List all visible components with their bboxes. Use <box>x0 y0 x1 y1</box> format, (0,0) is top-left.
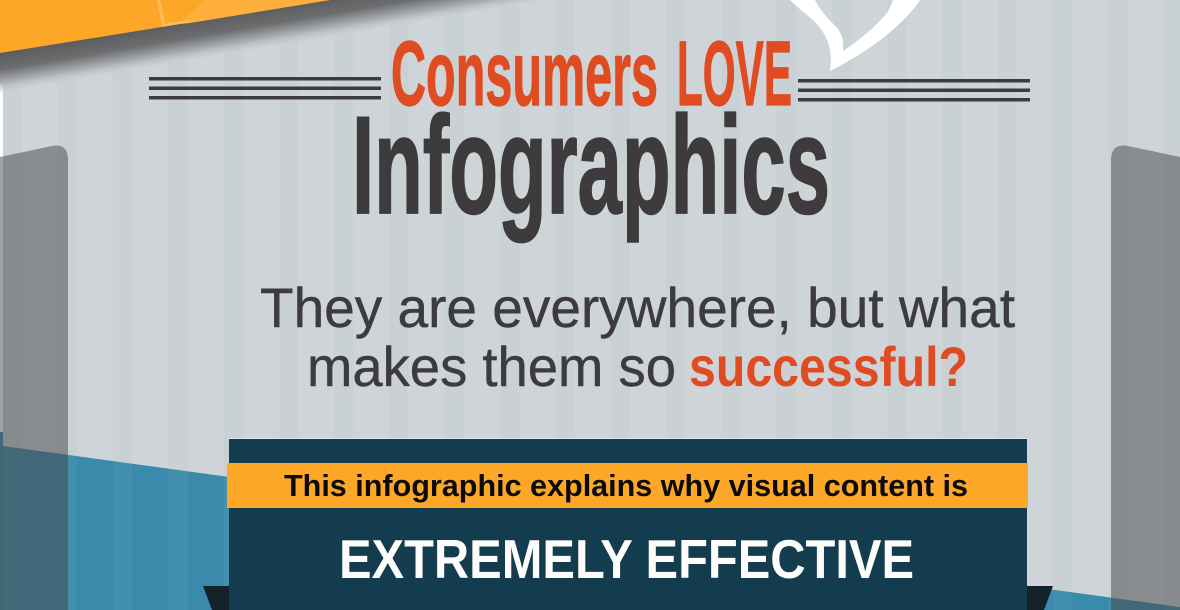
title rule right <box>798 79 1030 102</box>
strip text: This infographic explains why visual content is <box>284 468 968 503</box>
subtitle line 2: successful? <box>689 335 968 398</box>
title: Consumers LOVE: Consumers <box>391 23 658 125</box>
navy banner <box>227 438 1028 610</box>
title rule left <box>149 77 381 100</box>
title: Infographics: Infographics <box>352 88 830 243</box>
subtitle line 2: makes them so <box>307 335 676 398</box>
top shadow <box>0 0 700 116</box>
headline: EXTREMELY EFFECTIVE <box>339 528 914 590</box>
infographic header: LOVE <box>677 23 792 125</box>
subtitle line 1: They are everywhere, but what <box>260 276 1015 339</box>
orange strip <box>227 463 1028 508</box>
ribbon tail right <box>1027 586 1053 610</box>
side panel right <box>1111 146 1180 610</box>
blue diagonal band <box>0 432 1180 610</box>
ribbon tail left <box>203 586 229 610</box>
side panel left <box>0 146 68 610</box>
icon: white speech-bubble heart <box>790 0 920 71</box>
subtitle line 2 <box>307 335 968 398</box>
orange corner ribbon <box>0 0 330 53</box>
